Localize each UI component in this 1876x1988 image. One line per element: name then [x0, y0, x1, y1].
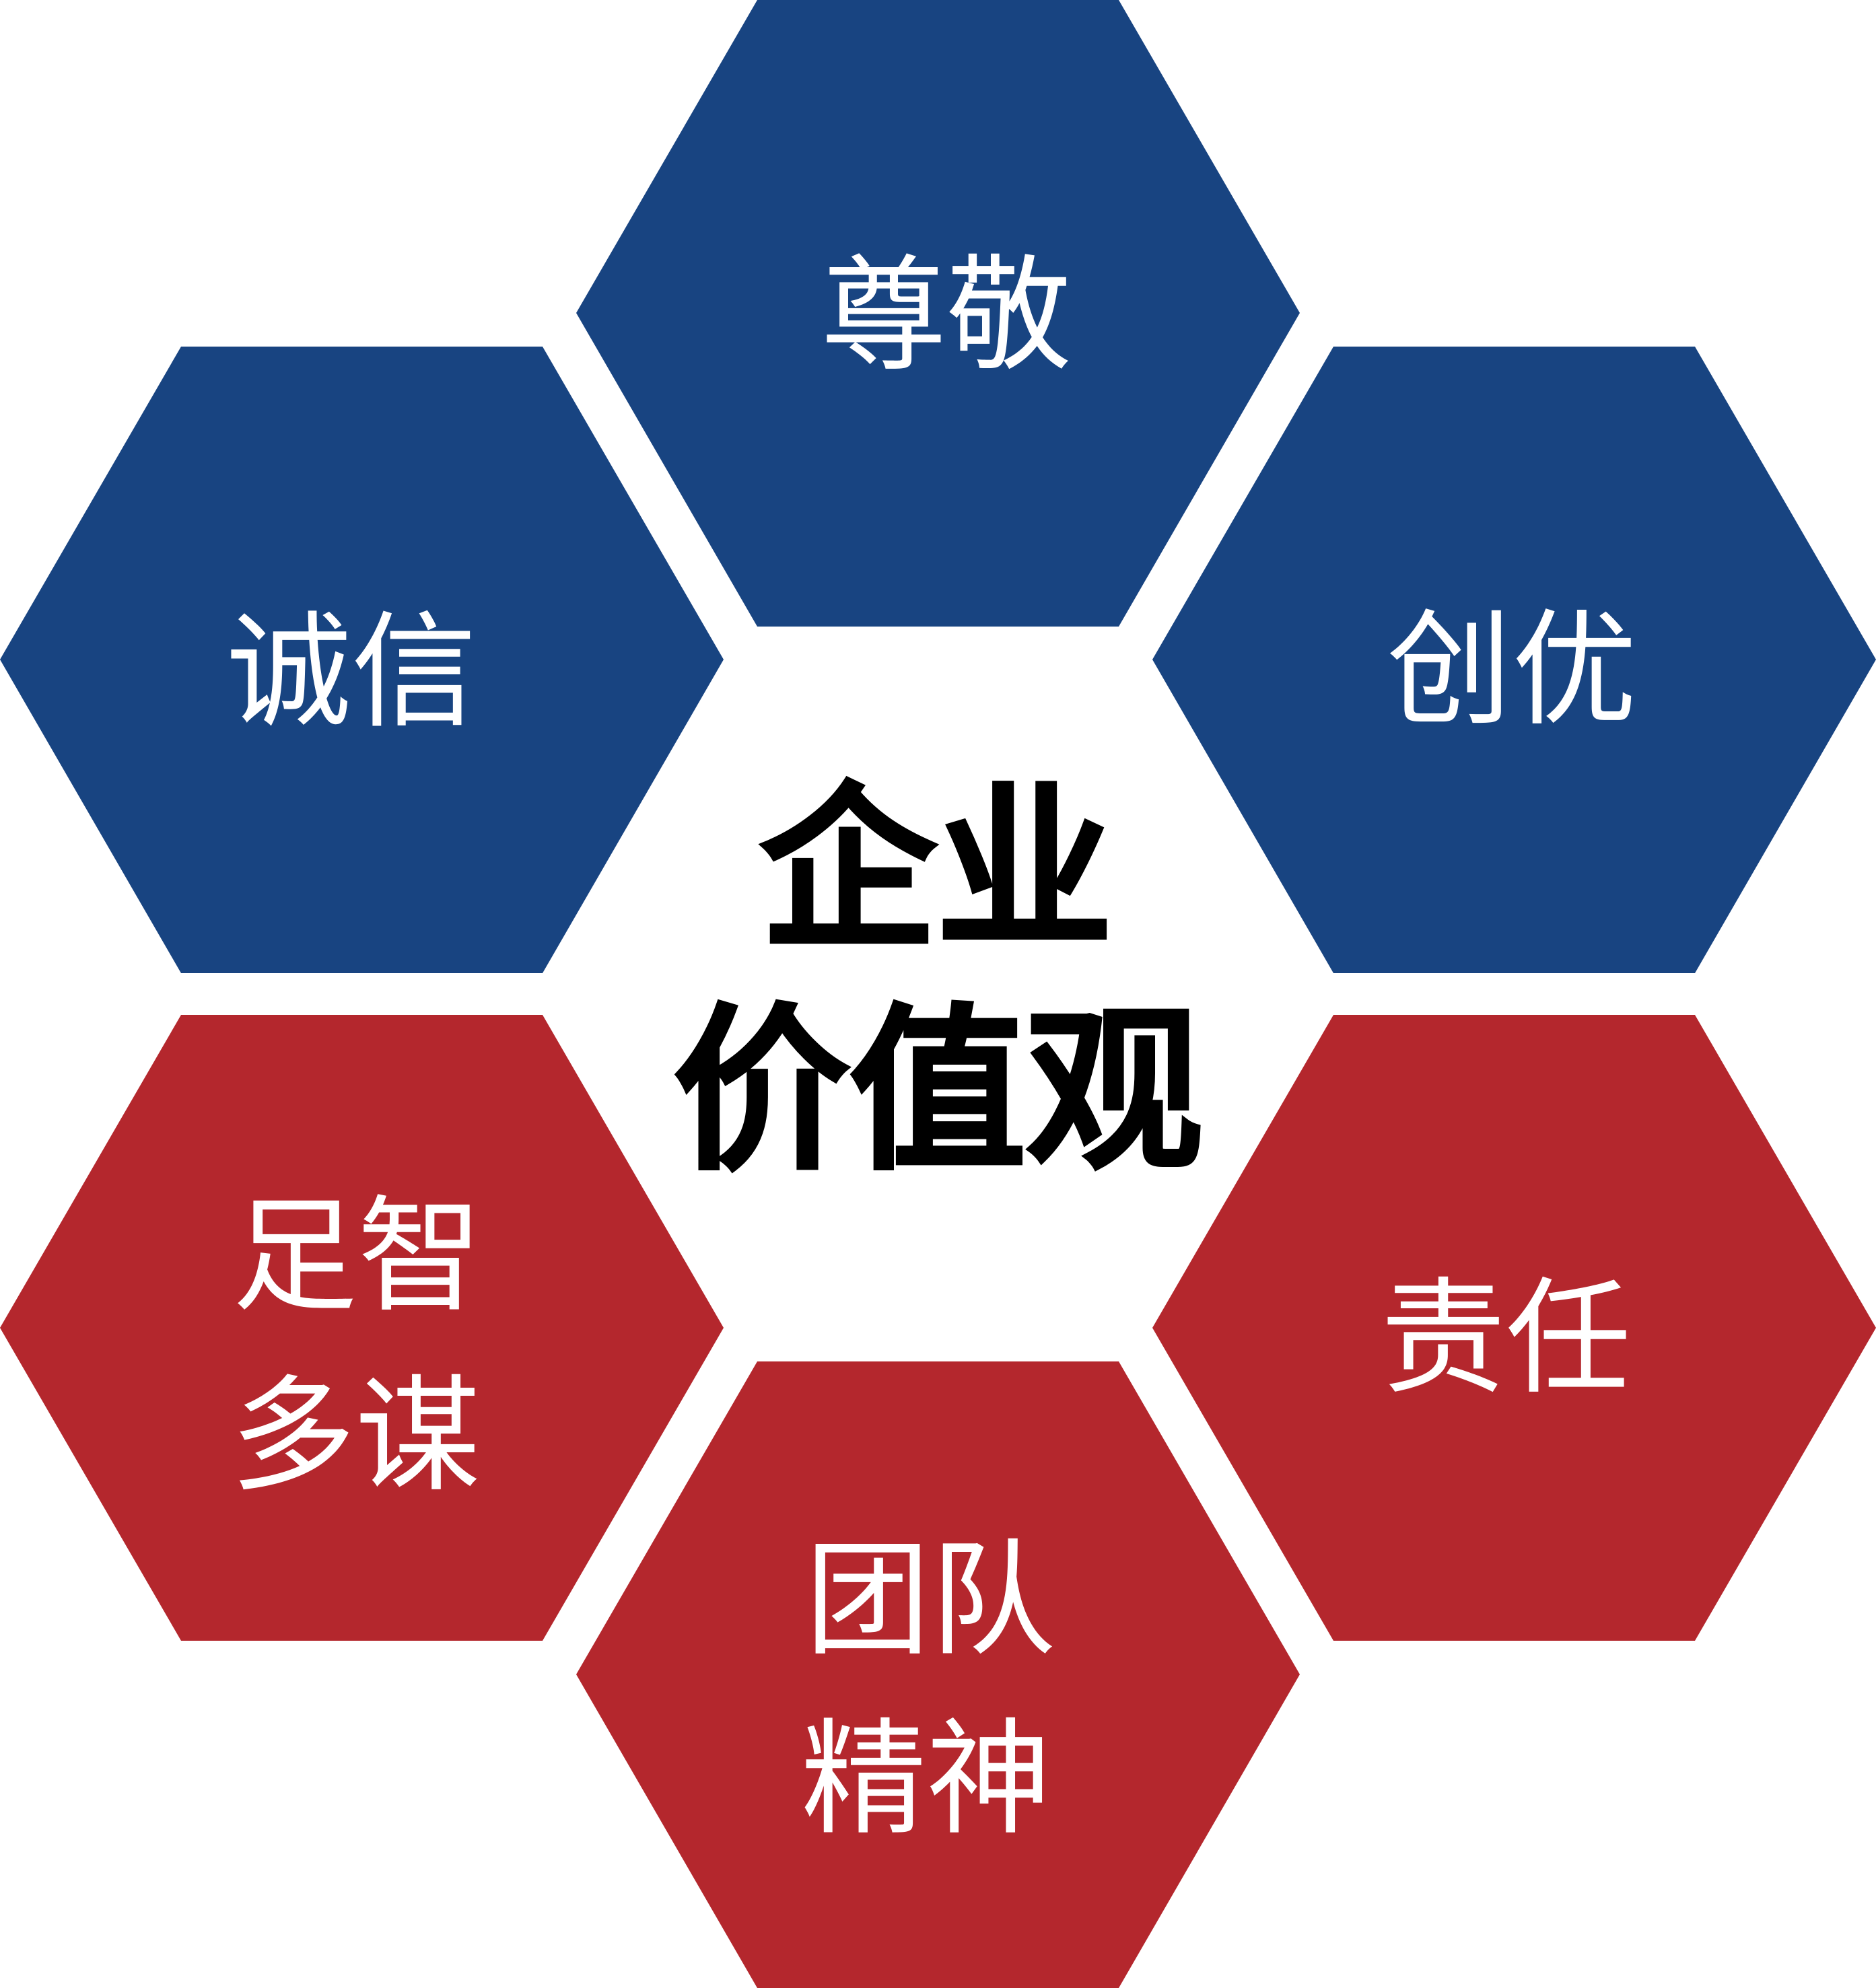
panel: excellence hexagon (upper right)	[1152, 347, 1876, 973]
label: spirit: 精神	[801, 1677, 1051, 1859]
label: respect: 尊敬	[821, 213, 1072, 395]
label: excellence: 创优	[1387, 568, 1637, 750]
panel: integrity hexagon (upper left)	[0, 347, 724, 973]
label: responsibility: 责任	[1381, 1236, 1631, 1418]
label: integrity: 诚信	[226, 570, 477, 752]
panel: teamwork hexagon (bottom)	[576, 1361, 1300, 1988]
title: corporate values: 企业	[760, 727, 1113, 982]
title: corporate values	[673, 727, 1202, 1203]
label: resourcefulness: 足智	[232, 1154, 483, 1336]
panel: responsibility hexagon (lower right)	[1152, 1015, 1876, 1641]
label: team: 团队	[805, 1498, 1055, 1680]
title: corporate values: 价值观	[673, 948, 1202, 1203]
panel: respect hexagon (top)	[576, 0, 1300, 627]
panel: resourcefulness hexagon (lower left)	[0, 1015, 724, 1641]
label: resourcefulness line two: 多谋	[230, 1334, 481, 1516]
